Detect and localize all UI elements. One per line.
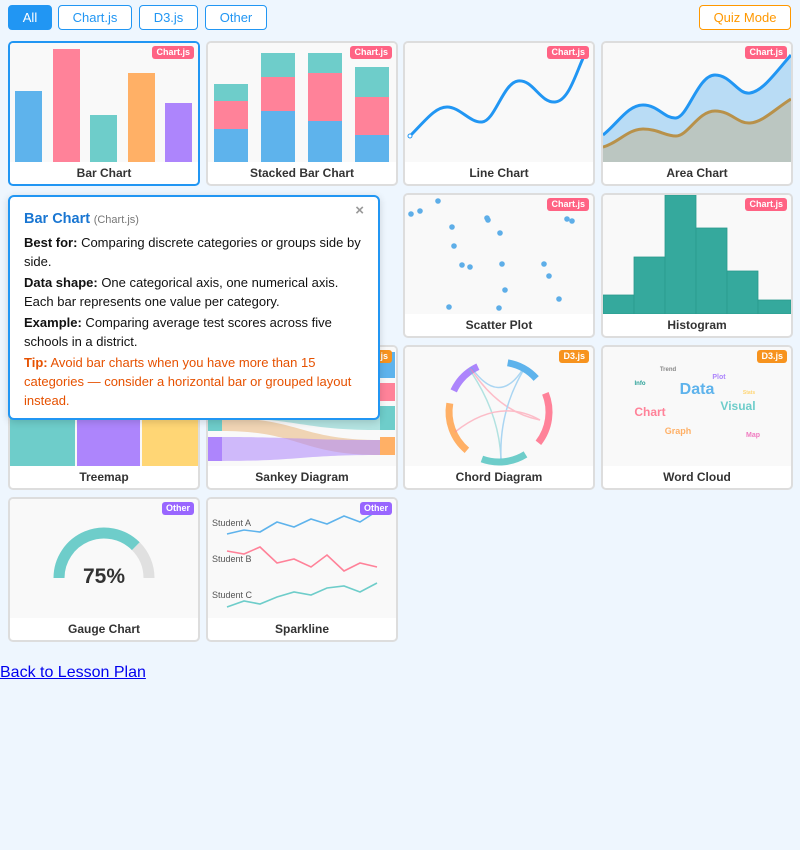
card: line chart: [403, 41, 595, 186]
close icon: ×: [355, 202, 364, 219]
card: histogram: Histogram: [667, 318, 727, 332]
card: chord diagram: D3.js: [563, 351, 585, 361]
card: word cloud: Word Cloud: [663, 470, 731, 484]
data shape: Data shape: One categorical axis, one numerical axis. Each bar represents one value per category.: [24, 275, 338, 309]
card: treemap (partly hidden): Chart.js: [156, 351, 190, 361]
card: word cloud: Plot: [712, 374, 726, 381]
card: stacked bar chart: [206, 41, 398, 186]
example: Example: Comparing average test scores across five schools in a district.: [24, 315, 332, 349]
quiz mode button: Quiz Mode: [714, 10, 776, 25]
card: word cloud: Stats: [743, 390, 755, 396]
card: stacked bar chart: Chart.js: [354, 47, 388, 57]
card: gauge chart: Gauge Chart: [68, 622, 140, 636]
card: histogram: Chart.js: [749, 199, 783, 209]
card: treemap (partly hidden): Treemap: [79, 470, 129, 484]
card: area chart: Area Chart: [666, 166, 728, 180]
filter button: All: [8, 5, 52, 30]
card: word cloud: Map: [746, 432, 760, 439]
filter button: D3.js: D3.js: [154, 10, 183, 25]
card: word cloud: Trend: [660, 367, 676, 373]
card: sparkline: Student C: [212, 590, 253, 600]
filter button: Chart.js: Chart.js: [73, 10, 117, 25]
card: chord diagram: Chord Diagram: [456, 470, 542, 484]
card: word cloud: Info: [634, 381, 646, 387]
card: word cloud: D3.js: [761, 351, 783, 361]
card: bar chart: [8, 41, 200, 186]
card: stacked bar chart: Stacked Bar Chart: [250, 166, 354, 180]
filter button: Other: Other: [220, 10, 252, 25]
card: sparkline: Sparkline: [275, 622, 329, 636]
card: word cloud: Data: [680, 381, 714, 398]
filter button: D3.js: [139, 5, 198, 30]
card: sankey diagram: D3.js: [366, 351, 388, 361]
card: area chart: Chart.js: [749, 47, 783, 57]
card: gauge chart: [8, 497, 200, 642]
back link: Back to Lesson Plan: [0, 664, 146, 681]
filter button: All: All: [23, 10, 37, 25]
card: word cloud: Graph: [665, 426, 691, 436]
card: line chart: Chart.js: [551, 47, 585, 57]
card: gauge chart: 75%: [83, 565, 125, 588]
card: area chart: [601, 41, 793, 186]
card: word cloud: Visual: [720, 399, 756, 413]
card: sparkline: Student B: [212, 554, 252, 564]
card: sparkline: [206, 497, 398, 642]
card: scatter plot: [403, 193, 595, 338]
filter button: Chart.js: [58, 5, 132, 30]
tooltip: bar chart details: [8, 195, 380, 420]
tip: Tip: Avoid bar charts when you have more than 15 categories — consider a horizontal bar or grouped layout instead.: [24, 355, 351, 408]
card: sankey diagram: Sankey Diagram: [255, 470, 349, 484]
card: treemap (partly hidden): [8, 345, 200, 490]
filter button: Other: [205, 5, 267, 30]
card: chord diagram: [403, 345, 595, 490]
card: gauge chart: Other: [166, 503, 190, 513]
card: word cloud: [601, 345, 793, 490]
card: word cloud: Chart: [634, 405, 666, 419]
best for: Best for: Comparing discrete categories or groups side by side.: [24, 235, 361, 269]
card: bar chart: Chart.js: [156, 47, 190, 57]
card: sankey diagram: [206, 345, 398, 490]
tooltip title: Bar Chart (Chart.js): [24, 211, 139, 227]
card: sparkline: Other: [364, 503, 388, 513]
card: scatter plot: Scatter Plot: [466, 318, 532, 332]
card: bar chart: Bar Chart: [77, 166, 131, 180]
quiz mode button: [699, 5, 791, 30]
card: histogram: [601, 193, 793, 338]
card: line chart: Line Chart: [469, 166, 529, 180]
card: sparkline: Student A: [212, 518, 251, 528]
card: scatter plot: Chart.js: [551, 199, 585, 209]
